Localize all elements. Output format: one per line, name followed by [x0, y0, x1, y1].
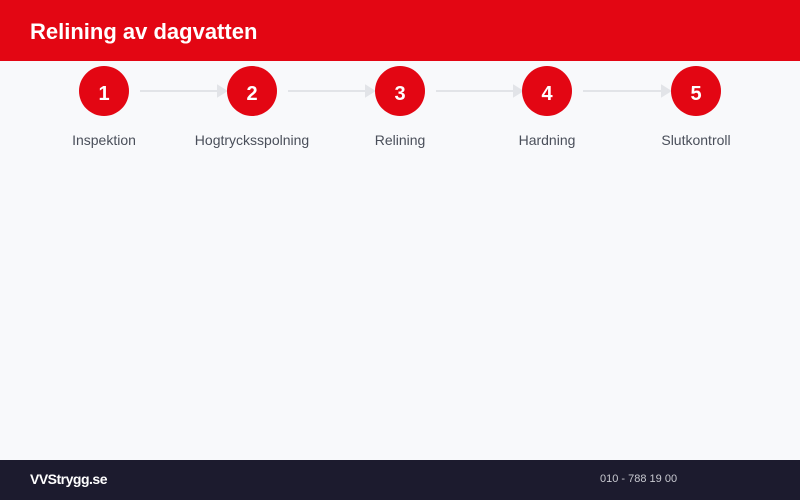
header	[0, 0, 800, 61]
arrows	[140, 84, 671, 98]
phone: 010 - 788 19 00	[600, 473, 677, 485]
label 4: Hardning	[519, 132, 575, 148]
label 1: Inspektion	[72, 132, 136, 148]
step 4	[522, 66, 572, 116]
step 2	[227, 66, 277, 116]
step 5	[671, 66, 721, 116]
step 1: 1	[98, 83, 110, 105]
title: Relining av dagvatten	[30, 19, 257, 44]
step 1	[79, 66, 129, 116]
label 3: Relining	[375, 132, 425, 148]
brand: VVStrygg.se	[30, 471, 107, 487]
label 5: Slutkontroll	[661, 132, 731, 148]
label 2: Hogtrycksspolning	[195, 132, 309, 148]
footer	[0, 460, 800, 500]
step 5: 5	[690, 83, 702, 105]
step 2: 2	[246, 83, 258, 105]
step 3: 3	[394, 83, 406, 105]
step 4: 4	[541, 83, 553, 105]
step 3	[375, 66, 425, 116]
